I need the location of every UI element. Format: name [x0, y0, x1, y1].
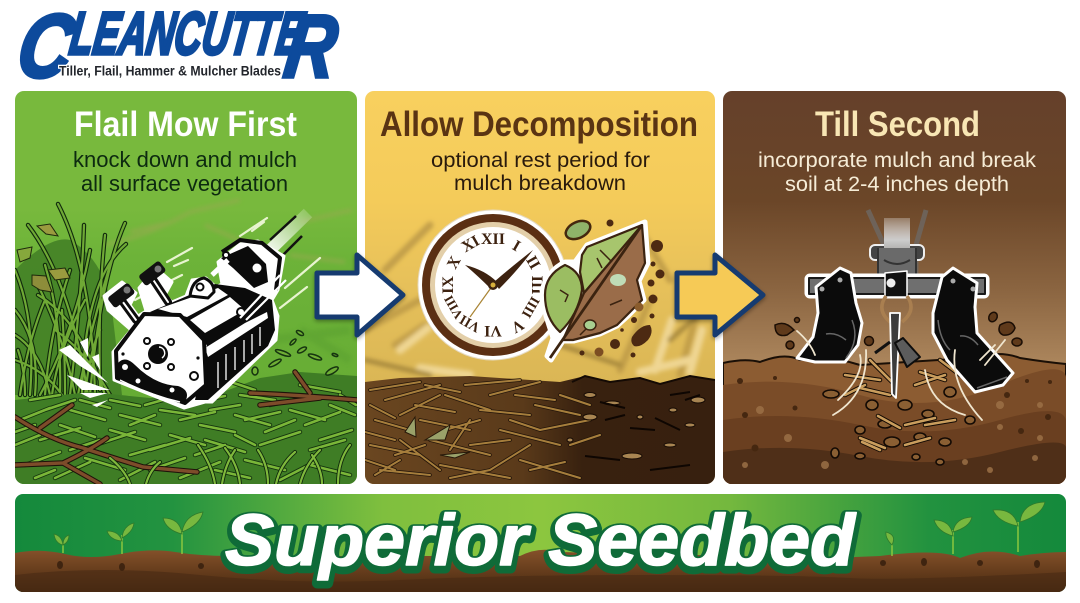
clock numerals: VIII	[441, 293, 466, 322]
mulch fibers	[365, 380, 600, 478]
bacteria and decay particles	[563, 217, 664, 358]
blurred background branches	[106, 199, 351, 342]
mulch and soil ground	[365, 376, 715, 484]
banner soil	[15, 550, 1066, 592]
panel: allow decomposition	[365, 91, 715, 484]
turned soil and mulch	[823, 387, 975, 465]
clock numerals: VI	[484, 322, 502, 339]
clock numerals: IX	[440, 276, 457, 294]
clock icon	[418, 210, 568, 360]
panel subtitle: optional rest period for	[431, 149, 650, 172]
decayed leaves in mulch	[405, 417, 470, 458]
soil layers	[723, 354, 1066, 484]
panel subtitle	[432, 152, 650, 190]
clock numerals: I	[509, 237, 523, 255]
clock numerals: VII	[457, 311, 483, 335]
tall grass clump	[15, 204, 126, 395]
right blade	[933, 268, 1013, 392]
clock numerals: II	[522, 253, 543, 272]
clock numerals: X	[444, 253, 465, 272]
clock numerals	[440, 231, 545, 339]
clippings	[252, 329, 339, 377]
lug	[190, 278, 214, 298]
panel subtitle	[758, 149, 1037, 196]
tiller blades icon	[797, 210, 1013, 398]
clock numerals: XII	[481, 231, 505, 248]
arrow: step two to three	[677, 255, 763, 335]
crossbar	[807, 276, 987, 296]
panel subtitle: incorporate mulch and break	[758, 149, 1037, 172]
logo tagline: Tiller, Flail, Hammer & Mulcher Blades	[59, 64, 281, 78]
blurred mulch background	[365, 225, 715, 375]
logo: Cleancutter: LEANCUTTE	[66, 0, 309, 67]
motion arcs	[797, 331, 1005, 420]
panel subtitle: knock down and mulch	[73, 147, 297, 172]
flail mower icon	[104, 213, 308, 408]
cut spray	[59, 338, 110, 407]
panel: till second	[723, 91, 1066, 484]
panel heading: Till Second	[815, 105, 980, 144]
center shank	[885, 271, 907, 297]
clock hands	[465, 265, 496, 286]
handle	[265, 213, 308, 255]
T handles	[120, 278, 168, 320]
panel heading: Flail Mow First	[74, 105, 297, 144]
banner: superior seedbed	[15, 494, 1066, 592]
soil clods	[567, 392, 705, 459]
panel subtitle	[74, 151, 296, 196]
left blade	[797, 268, 862, 362]
seedlings	[54, 502, 1045, 556]
flying soil clods	[775, 311, 1022, 349]
clock numerals: III	[528, 276, 545, 294]
clock numerals: XI	[459, 232, 483, 256]
ground mulch	[15, 372, 357, 484]
panel subtitle: all surface vegetation	[81, 171, 288, 196]
motion lines	[135, 218, 320, 308]
hitch	[221, 246, 268, 288]
clock numerals: IIII	[518, 294, 542, 320]
panel subtitle: soil at 2-4 inches depth	[785, 173, 1009, 196]
soil specks	[742, 401, 1043, 473]
banner title: Superior Seedbed	[225, 501, 857, 581]
panel: flail mow first	[15, 91, 357, 484]
body	[150, 284, 275, 400]
withered leaves	[17, 224, 70, 292]
end plate	[116, 314, 206, 403]
clock numerals: V	[508, 315, 527, 336]
foreground grass	[110, 445, 350, 484]
arrow: step one to two	[317, 255, 403, 335]
logo: Cleancutter	[11, 0, 343, 97]
banner title: Superior Seedbed	[225, 504, 857, 584]
mast	[868, 210, 926, 276]
outline	[104, 241, 284, 408]
decomposing leaf icon	[542, 222, 648, 360]
panel heading: Allow Decomposition	[380, 105, 698, 144]
panel subtitle: mulch breakdown	[454, 172, 626, 195]
branches	[15, 372, 357, 484]
